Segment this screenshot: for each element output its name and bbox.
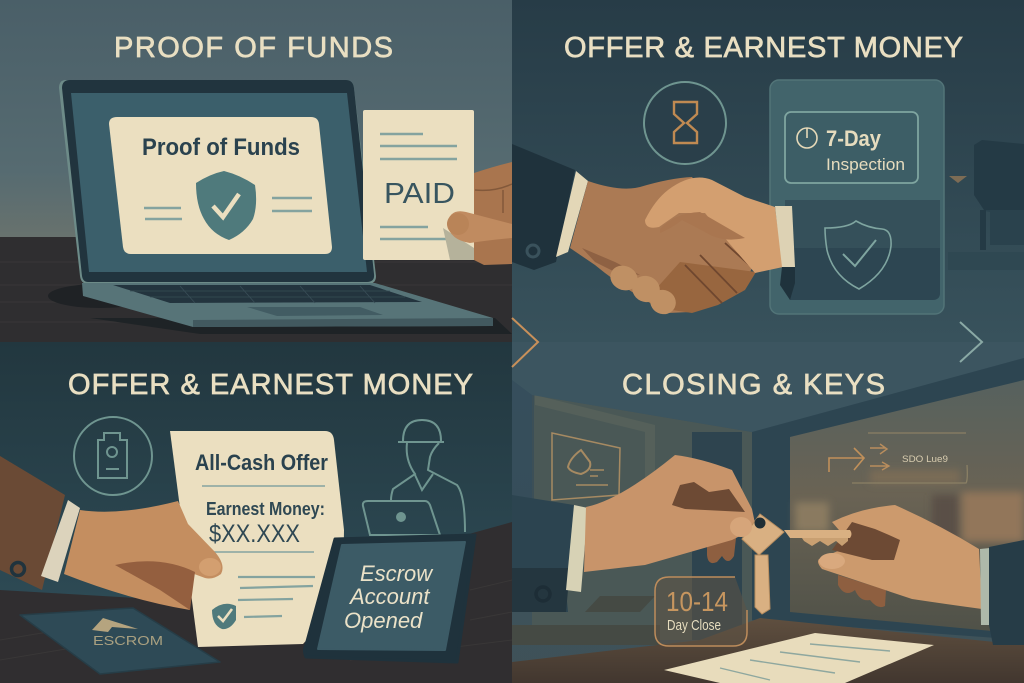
all-cash offer document: $XX.XXX: [209, 520, 300, 548]
right hand lower fingers: [655, 262, 756, 313]
heading: OFFER & EARNEST MONEY: [564, 32, 963, 64]
day close badge: 10-14: [666, 586, 728, 617]
proof of funds card: [109, 117, 332, 254]
escrow tablet: [304, 535, 475, 662]
laptop screen bezel: [59, 80, 376, 284]
laptop display: [71, 93, 367, 272]
trackpad: [247, 307, 383, 316]
laptop: [48, 80, 512, 334]
left cuff: [556, 171, 588, 257]
heading: PROOF OF FUNDS: [114, 32, 393, 64]
hidden fingers: [707, 538, 736, 563]
icon: shield outline: [825, 221, 891, 289]
hand: [818, 505, 982, 609]
cuff: [41, 500, 80, 582]
hand: [584, 455, 756, 572]
panel: closing and keys: [512, 342, 1024, 683]
proof of funds card: Proof of Funds: [142, 134, 300, 161]
right arm and hand: [818, 505, 1024, 645]
handshake: [512, 144, 795, 318]
paid document: PAID: [384, 178, 455, 210]
paid document: [363, 110, 474, 260]
right cuff: [775, 206, 795, 267]
left arm and hand: [512, 455, 756, 612]
heading: CLOSING & KEYS: [622, 369, 885, 401]
heading: OFFER & EARNEST MONEY: [68, 369, 473, 401]
day close badge: [655, 577, 747, 646]
window frame: [752, 358, 1024, 640]
wall frame bands: [535, 395, 655, 500]
desk: [0, 237, 512, 342]
icon: worker with laptop: [363, 420, 465, 535]
hand: [64, 501, 223, 610]
left suit sleeve: [512, 144, 575, 270]
key: [742, 514, 852, 614]
panel: proof of funds: [0, 0, 512, 342]
door: [692, 432, 742, 640]
icon: document in circle: [74, 417, 152, 495]
background furniture: [512, 596, 660, 645]
hand with sleeve: [0, 456, 223, 610]
panel: offer and inspection: [512, 0, 1024, 342]
cuff: [980, 548, 990, 625]
7-day inspection callout: Inspection: [826, 155, 905, 174]
all-cash offer document: Earnest Money:: [206, 499, 325, 519]
escrow tablet: Opened: [344, 608, 423, 633]
inspection panel: [770, 80, 944, 314]
icon: hand holding paper: [447, 162, 512, 265]
icon: hourglass: [644, 82, 726, 164]
escrow folder: [20, 608, 220, 674]
desk: [0, 522, 512, 683]
keyboard: [113, 285, 422, 303]
desk: [512, 618, 1024, 683]
background furniture: [948, 140, 1024, 270]
cuff: [566, 505, 588, 592]
escrow folder: ESCROM: [93, 633, 163, 648]
7-day inspection callout: [785, 112, 918, 183]
escrow tablet: Escrow: [360, 561, 434, 586]
shield check icon: [196, 171, 256, 240]
right hand: [645, 178, 783, 273]
escrow tablet: Account: [348, 584, 430, 609]
left wall: [532, 395, 752, 640]
all-cash offer document: [170, 431, 344, 647]
panel: offer and earnest money: [0, 342, 512, 683]
icon: left thumb: [730, 517, 752, 537]
wall sign: [552, 433, 620, 500]
keyboard base: [82, 283, 493, 327]
all-cash offer document: All-Cash Offer: [195, 450, 328, 475]
day close badge: Day Close: [667, 617, 721, 634]
hidden fingers: [838, 575, 886, 607]
document on desk: [664, 633, 934, 683]
ceiling: [512, 342, 1024, 432]
sleeve: [512, 495, 574, 612]
window signage: [829, 433, 967, 483]
left hand: [570, 177, 755, 313]
arrow: process flow: [512, 318, 982, 367]
icon: clock: [797, 128, 817, 148]
7-day inspection callout: 7-Day: [826, 126, 882, 151]
window interior: [790, 380, 1024, 634]
icon: check badge: [212, 604, 236, 629]
window signage: SDO Lue9: [902, 454, 948, 465]
sleeve: [989, 540, 1024, 645]
fingers: [606, 261, 680, 318]
sleeve: [0, 456, 65, 590]
